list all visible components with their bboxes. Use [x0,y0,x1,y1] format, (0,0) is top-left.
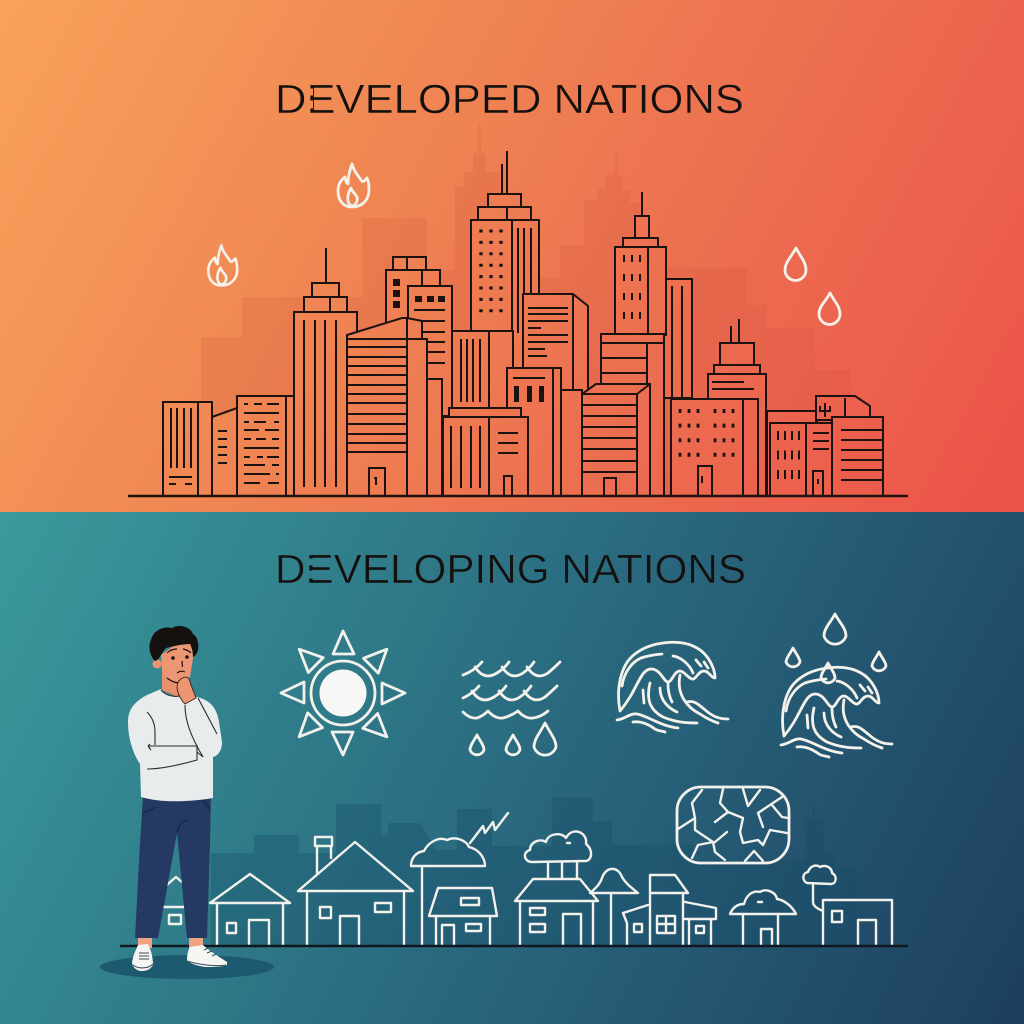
icon: water drop upper [785,248,806,280]
neck and face [152,642,193,697]
house: small gabled [210,874,290,946]
sweater [128,689,222,801]
shoes [132,944,227,971]
heading: developed nations: DEVELOPED NATIONS [275,76,744,122]
icon: tidal wave [617,642,728,732]
house: trapezoid roof [429,888,497,946]
building: low block with door [443,408,528,496]
house: behind figure [162,877,190,924]
building: central tower [471,151,539,420]
house: with small cloud tree [803,866,892,946]
house: large with chimney [298,837,413,946]
building: stepped block [386,257,452,416]
building: front striped block [582,384,650,496]
panel: developing nations [0,512,1024,1024]
hair [149,626,198,661]
icon: flame upper [338,164,369,207]
tree: cloud with lightning [411,813,508,946]
legs and ankles [135,797,211,948]
ground shadow [100,955,274,979]
house: multi-level [623,875,716,946]
heading: developing nations: DEVELOPING NATIONS [275,546,746,592]
village of houses [162,813,892,946]
house: smoking chimneys [515,831,598,946]
building: mid block [452,331,513,421]
building: right rear block [648,279,692,398]
icon: water drop lower [819,293,840,324]
building: far right cluster [767,396,883,496]
ground line [120,945,908,947]
building: small windows block [507,368,561,496]
icon: flood waves and rain [463,662,560,755]
icon: tidal wave with rain [781,614,892,757]
background skyline silhouette [201,125,851,496]
icon: flame lower [208,246,237,286]
city skyline [128,151,908,496]
house: cloud roof [730,890,796,946]
ground line [128,495,908,497]
building: striped slab [347,318,442,496]
building: right tower [615,192,666,335]
building: left cluster [163,396,294,496]
panel: developed nations [0,0,1024,512]
building: right tower base [601,334,664,496]
building: angled block [523,294,588,400]
building: narrow filler [561,390,582,496]
background skyline silhouette [211,797,857,946]
icon: sun [281,631,405,755]
hand on chin [177,677,196,704]
building: wide low block stepped [708,319,766,496]
person thinking [100,626,274,979]
tree: triangular canopy [590,869,638,946]
icon: cracked dry earth [677,787,789,863]
building: dotted windows block [671,399,758,496]
building: left tower [294,248,357,496]
